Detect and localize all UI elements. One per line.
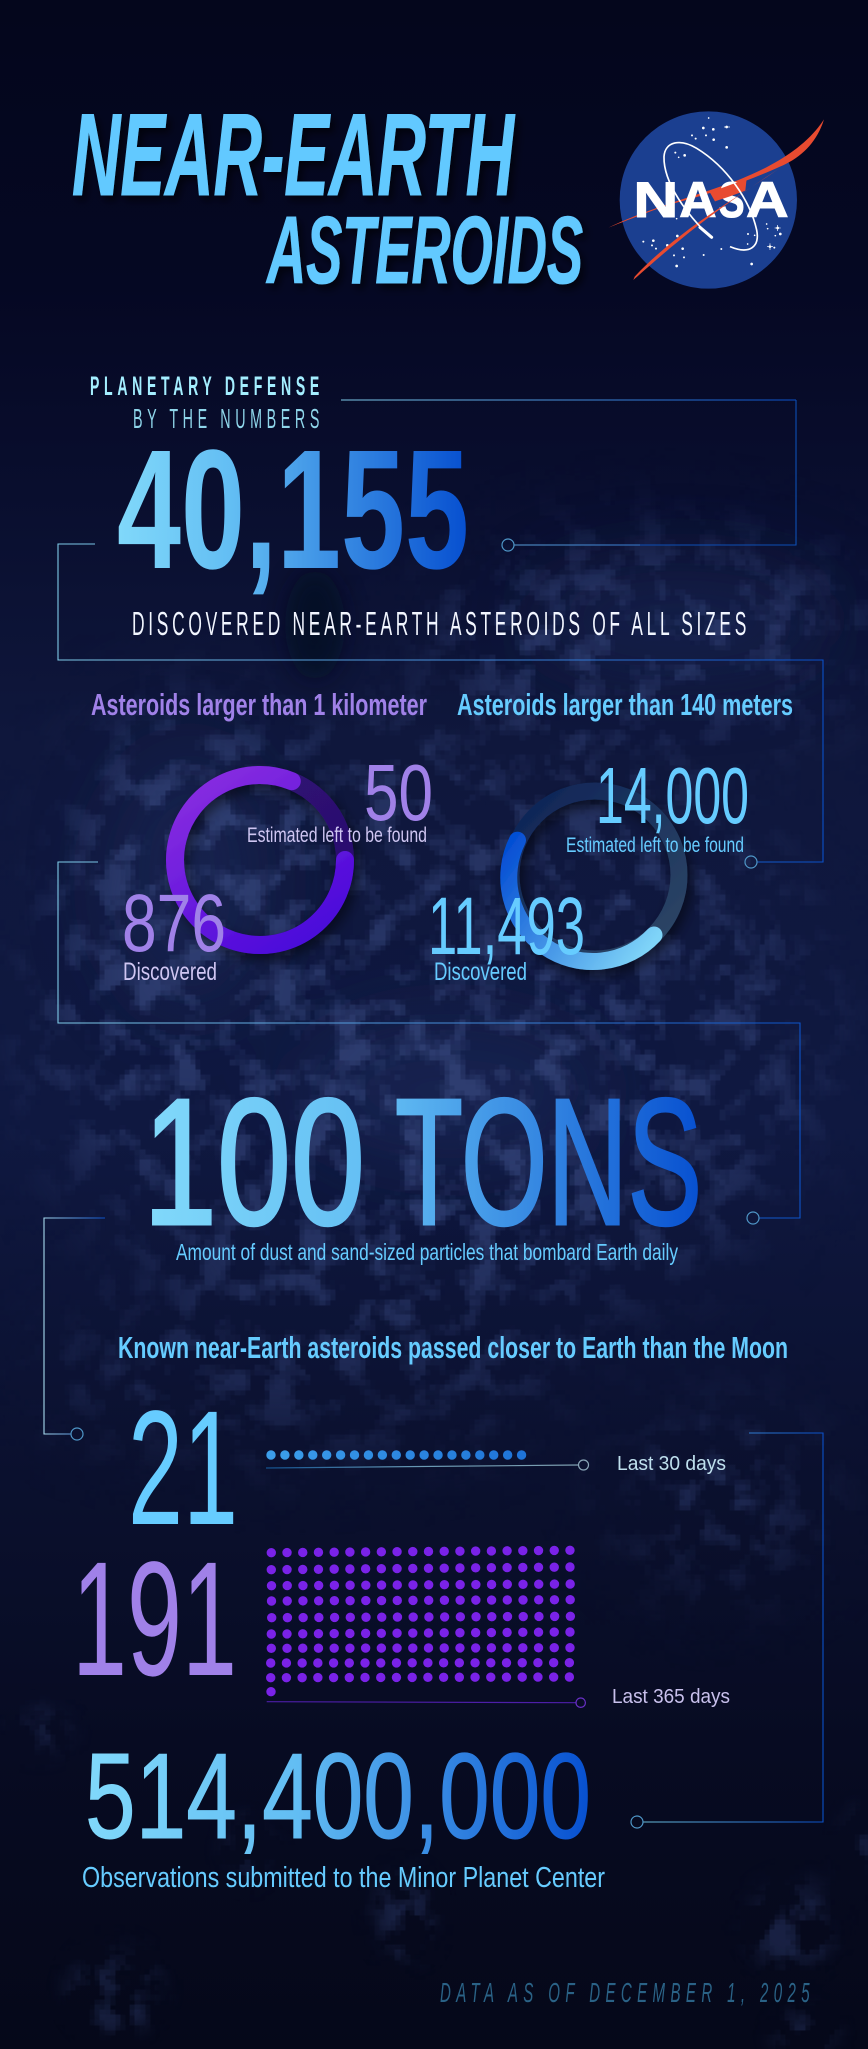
icon: NASA logo: N [633, 172, 678, 228]
leader line: 30 days [266, 1460, 588, 1470]
stat: 50 left: Estimated left to be found [247, 824, 427, 847]
stat: 11,493 discovered: 11,493 [428, 881, 585, 972]
donut chart: 1 kilometer [175, 775, 345, 945]
icon: NASA logo: S [719, 172, 745, 228]
stat: 14,000 left: Estimated left to be found [566, 834, 744, 857]
stat: 11,493 discovered [428, 881, 585, 986]
connector: frame 3 [58, 862, 800, 1224]
connector: frame 5 [631, 1433, 823, 1828]
donut chart: 140 meters [509, 791, 679, 962]
panel: last 30 days [128, 1376, 726, 1559]
text: dust description: Amount of dust and sand-sized particles that bombard Earth daily [176, 1239, 678, 1265]
big number: 40,155: 40,155 [117, 415, 469, 605]
heading: planetary defense [90, 371, 324, 434]
stat: 50 left [247, 748, 433, 847]
stat: 14,000 left [566, 751, 749, 857]
stat: 50 left: 50 [364, 748, 433, 837]
heading: planetary defense: PLANETARY DEFENSE [90, 371, 324, 401]
panel: asteroids larger than 1 kilometer [91, 687, 433, 986]
leader line: 365 days [267, 1698, 585, 1707]
heading: 1 kilometer: Asteroids larger than 1 kilometer [91, 687, 427, 722]
big number: 514,400,000: 514,400,000 [85, 1728, 591, 1864]
stat: 876 discovered: 876 [122, 878, 226, 969]
connector: frame 2 [58, 544, 823, 868]
heading: planetary defense: BY THE NUMBERS [133, 403, 324, 434]
big number: 100 tons: 100 [143, 1062, 365, 1263]
dot row: 30 days [271, 1450, 522, 1460]
stat: 876 discovered [122, 878, 226, 986]
icon: NASA logo: A [679, 172, 717, 228]
connector: frame 1 [341, 400, 796, 551]
big number: 191: 191 [72, 1527, 237, 1710]
connector: frame 4 [44, 1218, 105, 1440]
big number: 100 tons [143, 1062, 702, 1263]
icon: NASA logo: A [746, 172, 789, 228]
panel: last 365 days [72, 1527, 730, 1710]
title [72, 89, 583, 304]
label: last 365 days: Last 365 days [612, 1686, 730, 1708]
label: last 30 days: Last 30 days [617, 1453, 726, 1475]
stat: 14,000 left: 14,000 [596, 751, 749, 840]
big number: 21: 21 [128, 1376, 238, 1559]
icon: NASA logo [608, 111, 824, 289]
panel: asteroids larger than 140 meters [428, 687, 793, 986]
text: observations description: Observations submitted to the Minor Planet Center [82, 1862, 605, 1894]
title: NEAR-EARTH [72, 89, 515, 220]
stat: 876 discovered: Discovered [123, 958, 217, 986]
stat: 11,493 discovered: Discovered [434, 958, 527, 986]
title: ASTEROIDS [266, 197, 583, 304]
dot grid: 365 days [271, 1550, 571, 1692]
